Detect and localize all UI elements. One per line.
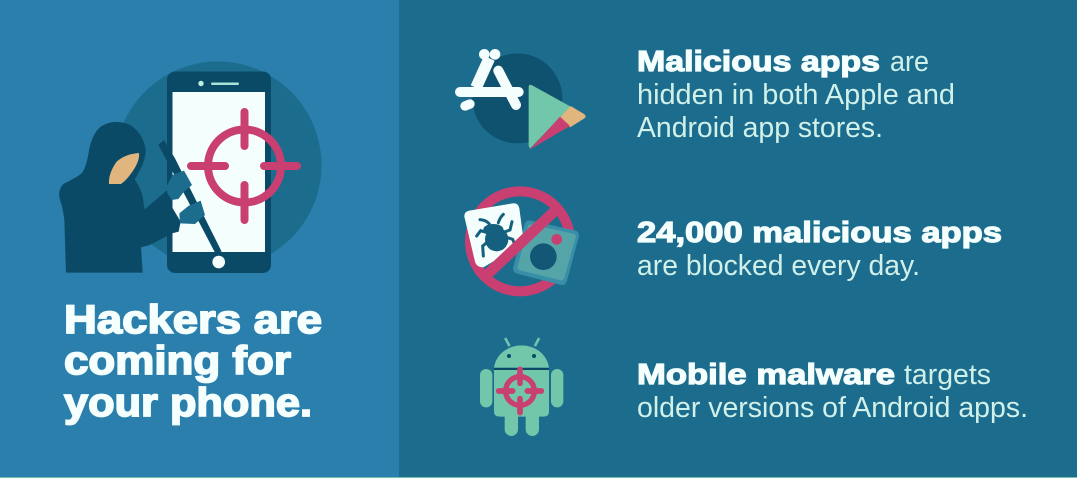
heading: your phone. bbox=[64, 381, 312, 425]
heading: Hackers are bbox=[64, 298, 322, 342]
panel: right background bbox=[399, 0, 1077, 478]
text block: malicious apps: hidden in both Apple and bbox=[637, 79, 955, 111]
text block: mobile malware bbox=[637, 359, 1028, 424]
app store symbol bbox=[460, 49, 519, 106]
text block: mobile malware: Mobile malware bbox=[637, 359, 895, 391]
text block: blocked apps: 24,000 malicious apps bbox=[637, 217, 1002, 249]
heading bbox=[64, 298, 322, 425]
prohibition ring bbox=[470, 191, 570, 291]
backdrop circle bbox=[114, 62, 322, 268]
face bbox=[109, 153, 139, 184]
play store triangle bbox=[529, 85, 586, 149]
text block: blocked apps: are blocked every day. bbox=[637, 250, 920, 282]
text block: mobile malware: older versions of Android apps. bbox=[637, 392, 1028, 424]
crowbar bbox=[158, 140, 222, 253]
target bbox=[499, 369, 541, 413]
camera app tile bbox=[518, 225, 574, 280]
gloves bbox=[167, 171, 192, 200]
hacker and phone illustration bbox=[59, 62, 322, 273]
text block: blocked apps bbox=[637, 217, 1002, 282]
icon: no malicious apps bbox=[464, 191, 574, 291]
panel: left background bbox=[0, 0, 399, 478]
icon: app stores bbox=[460, 49, 586, 149]
phone bbox=[167, 72, 271, 273]
prohibition bar bbox=[485, 212, 554, 277]
text block: malicious apps bbox=[637, 46, 955, 144]
bug tile bbox=[464, 203, 524, 267]
text block: malicious apps: Android app stores. bbox=[637, 112, 883, 144]
android robot bbox=[480, 337, 563, 436]
hooded hacker bbox=[59, 122, 222, 273]
text block: malicious apps: are bbox=[890, 46, 929, 78]
text block: mobile malware: targets bbox=[904, 359, 991, 391]
dark circle bbox=[472, 53, 562, 143]
text block: malicious apps: Malicious apps bbox=[637, 46, 880, 78]
heading: coming for bbox=[64, 339, 291, 383]
icon: android target bbox=[480, 337, 563, 436]
crosshair target bbox=[191, 112, 297, 220]
